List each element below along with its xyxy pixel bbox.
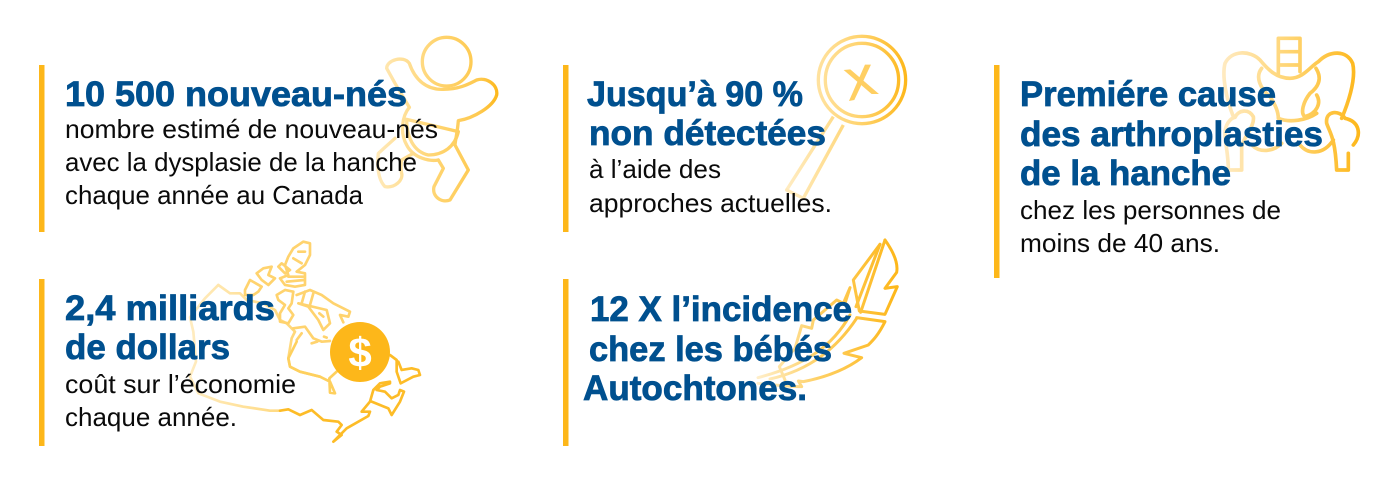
panel: newborns xyxy=(39,37,497,232)
accent bar xyxy=(39,65,44,232)
text block xyxy=(1020,195,1281,258)
heading: 12 X l’incidence xyxy=(590,290,852,329)
text block xyxy=(65,114,438,210)
text block xyxy=(589,154,832,218)
heading: de dollars xyxy=(65,328,230,367)
heading: des arthroplasties xyxy=(1020,115,1323,154)
accent bar xyxy=(39,279,44,446)
icon: dollar coin xyxy=(330,322,390,382)
heading: Premiére cause xyxy=(1020,75,1276,114)
panel: undetected xyxy=(563,36,906,232)
text block: approches actuelles. xyxy=(589,188,832,218)
icon: feather xyxy=(758,240,897,387)
heading xyxy=(587,75,826,153)
heading: chez les bébés xyxy=(589,330,832,369)
heading xyxy=(65,289,275,367)
text block: chaque année. xyxy=(65,402,237,432)
map: eastern coast xyxy=(280,342,420,442)
text block xyxy=(65,369,296,432)
panel: economic cost xyxy=(39,242,420,446)
heading: Autochtones. xyxy=(583,369,807,408)
text block: chez les personnes de xyxy=(1020,195,1281,225)
heading: non détectées xyxy=(589,114,826,153)
accent bar xyxy=(994,65,1000,278)
heading: 2,4 milliards xyxy=(65,289,275,328)
heading: 10 500 nouveau-nés xyxy=(65,75,407,114)
map: western outline xyxy=(190,285,320,411)
text block: coût sur l’économie xyxy=(65,369,296,399)
map: arctic islands xyxy=(245,242,350,343)
panel: hip replacement xyxy=(994,38,1358,278)
panel: indigenous incidence xyxy=(563,240,897,446)
heading xyxy=(583,290,852,408)
heading: Jusqu’à 90 % xyxy=(587,75,803,114)
text block: à l’aide des xyxy=(589,154,721,184)
text block: nombre estimé de nouveau-nés xyxy=(65,114,438,144)
heading: de la hanche xyxy=(1020,154,1231,193)
text block: chaque année au Canada xyxy=(65,180,364,210)
text block: moins de 40 ans. xyxy=(1020,228,1220,258)
icon: baby xyxy=(378,37,497,201)
icon: pelvis xyxy=(1224,38,1358,170)
icon: magnifying glass xyxy=(787,36,906,198)
accent bar xyxy=(563,279,568,446)
accent bar xyxy=(563,65,568,232)
icon: dollar coin: $ xyxy=(348,329,372,376)
icon: map of Canada xyxy=(190,242,420,442)
heading xyxy=(1020,75,1323,193)
text block: avec la dysplasie de la hanche xyxy=(65,147,417,177)
